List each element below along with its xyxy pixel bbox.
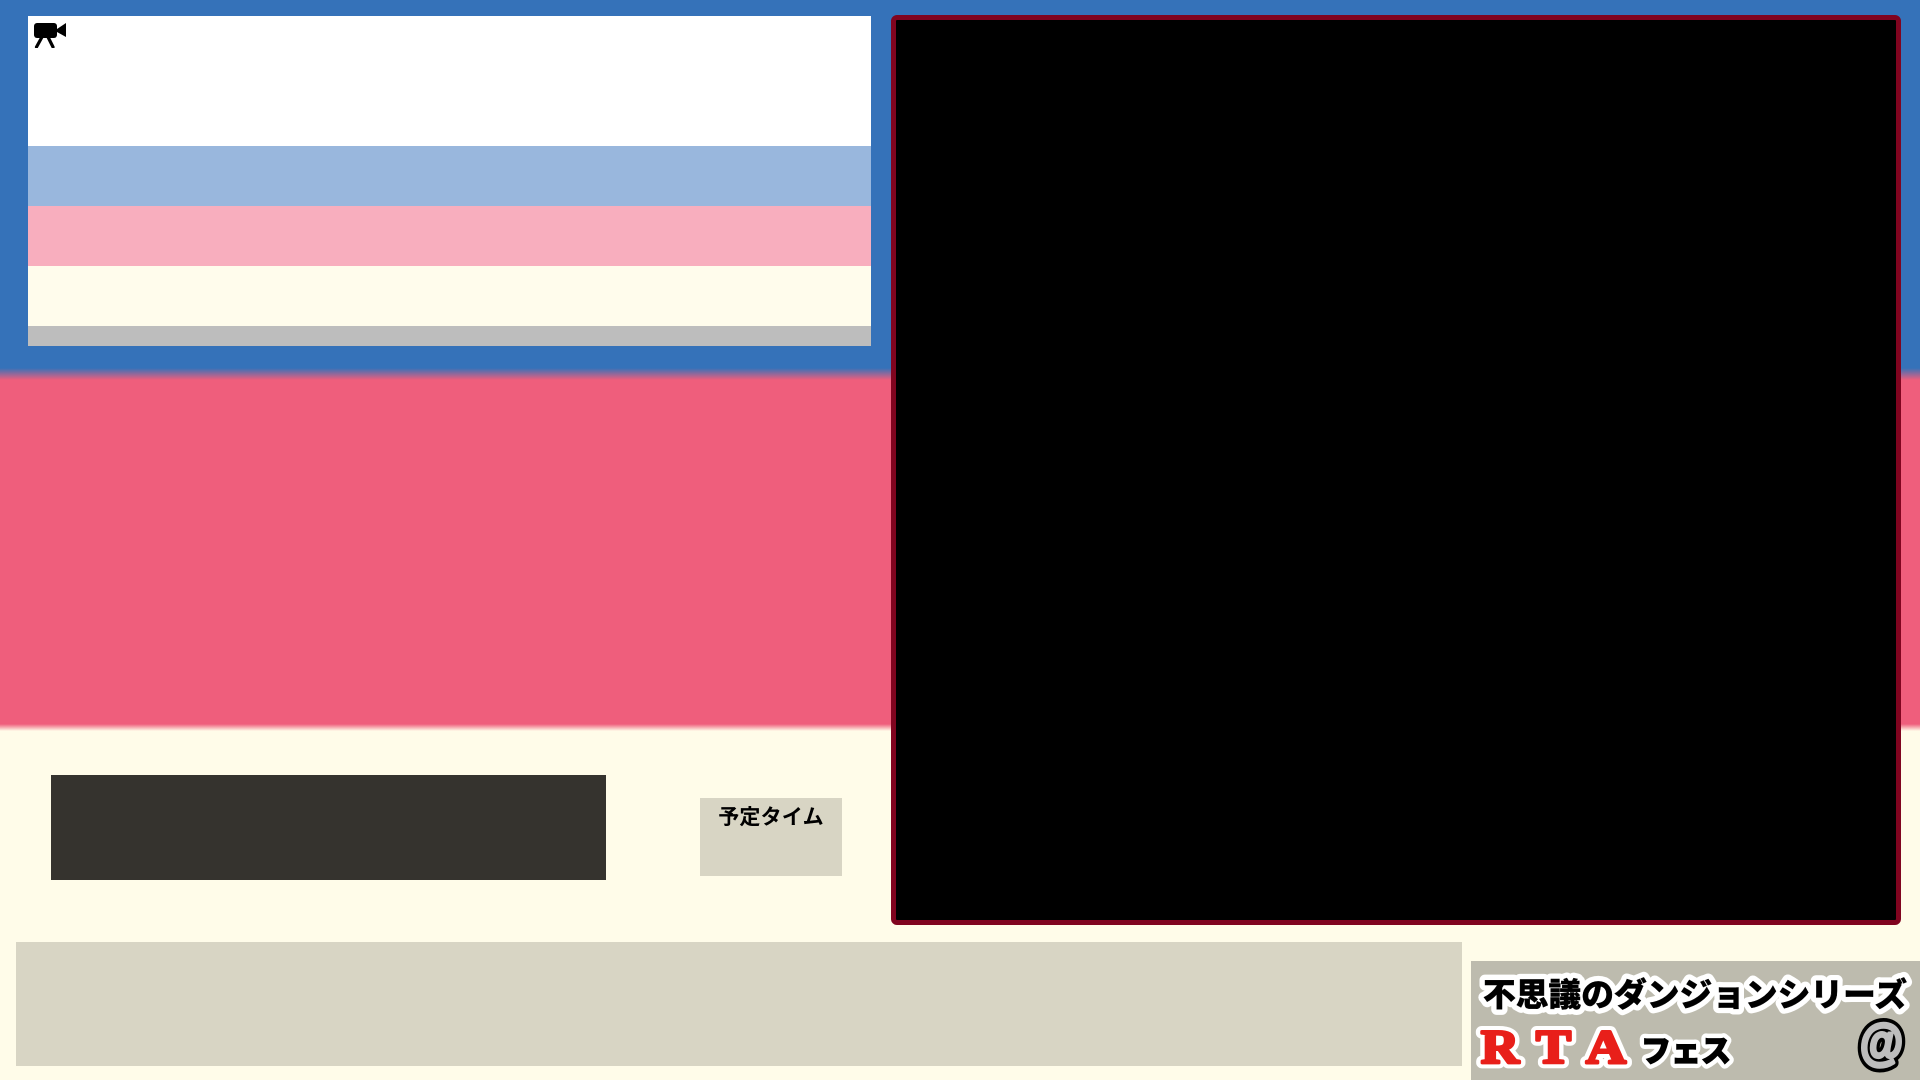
icon: video camera on tripod <box>34 23 66 48</box>
panel: bottom info bar <box>16 942 1462 1066</box>
panel: game video frame <box>891 15 1901 925</box>
logo title: series name: 不思議のダンジョンシリーズ <box>1483 976 1907 1013</box>
panel: event logo <box>1471 961 1920 1080</box>
panel: runner info stack <box>28 16 871 346</box>
label: estimated time: 予定タイム <box>718 806 824 829</box>
band: gray row <box>28 326 871 346</box>
logo: festival text: フェス <box>1641 1034 1731 1069</box>
logo: RTA letters: R <box>1481 1021 1520 1074</box>
logo title: series name: 不思議のダンジョンシリーズ <box>1483 976 1907 1013</box>
logo: festival text: フェス <box>1641 1034 1731 1069</box>
logo: RTA letters: A <box>1586 1021 1626 1074</box>
icon: at mark: @ <box>1860 1014 1903 1070</box>
logo: RTA letters: T <box>1536 1021 1571 1074</box>
band: cream row <box>28 266 871 326</box>
icon: at mark: @ <box>1860 1014 1903 1070</box>
logo: RTA letters: A <box>1586 1021 1626 1074</box>
logo: RTA letters: T <box>1536 1021 1571 1074</box>
band: pink row <box>28 206 871 266</box>
logo: RTA letters <box>1481 1021 1626 1074</box>
panel: timer dark box <box>51 775 606 880</box>
logo: RTA letters: R <box>1481 1021 1520 1074</box>
band: blue row <box>28 146 871 206</box>
panel: estimated time box <box>700 798 842 876</box>
